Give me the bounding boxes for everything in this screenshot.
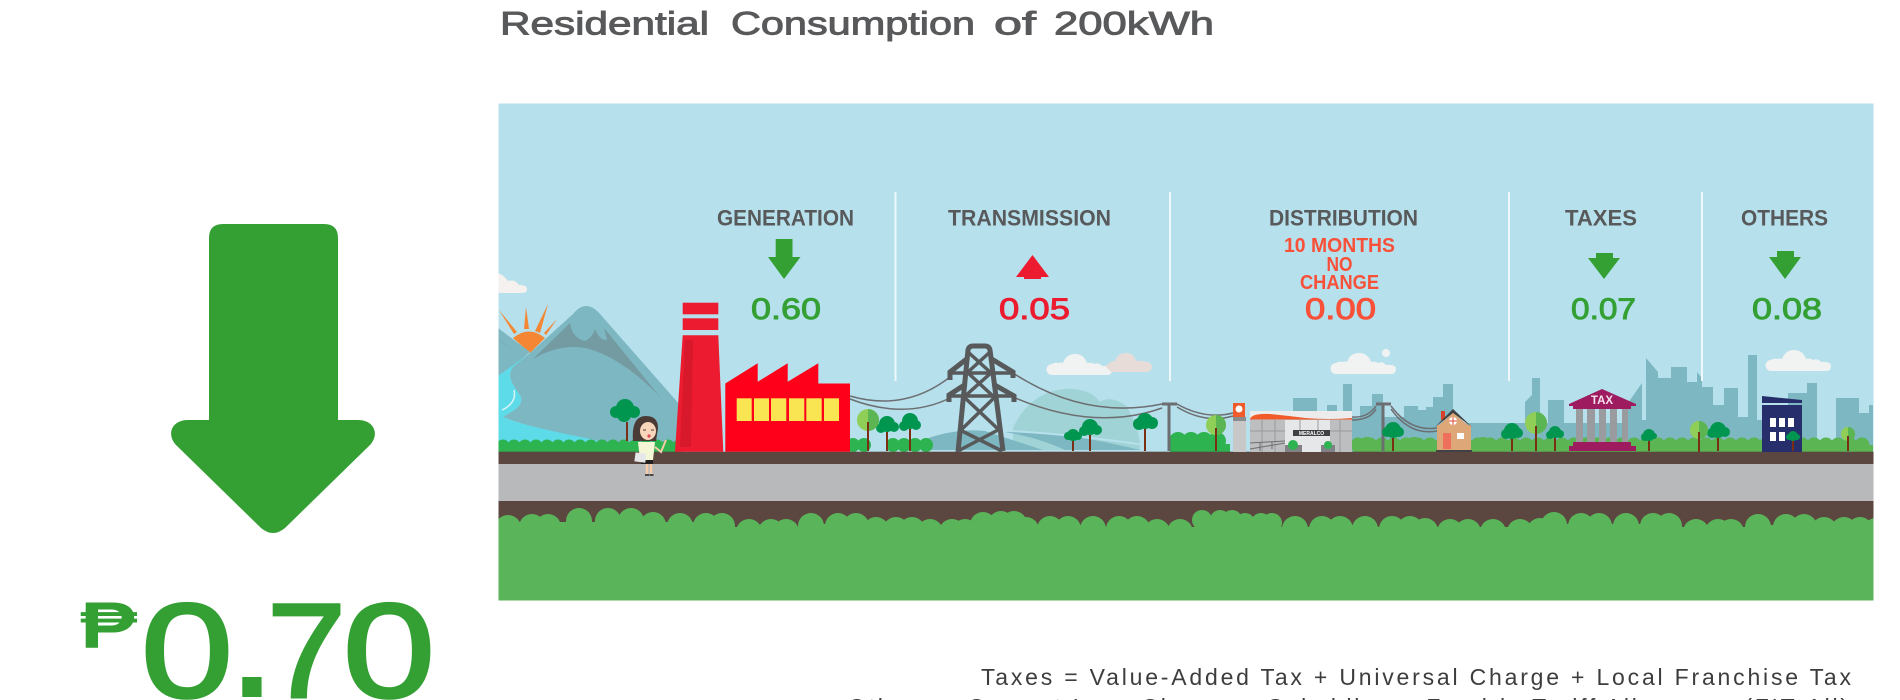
label: transmission: TRANSMISSION <box>948 206 1111 230</box>
total decrease amount <box>80 577 435 700</box>
icon: up arrow transmission <box>1016 255 1049 279</box>
shop building: MERALCO <box>1299 431 1324 437</box>
mountains <box>498 306 680 452</box>
total decrease amount: ₱ <box>80 588 138 662</box>
label: taxes: 0.07 <box>1571 293 1636 326</box>
panel: illustrated street scene <box>495 104 1889 600</box>
footnote: taxes and others definitions: Taxes = Value-Added Tax + Universal Charge + Local Franchise Tax <box>981 664 1852 690</box>
shop building <box>1233 403 1352 452</box>
sky <box>498 104 1874 452</box>
trees <box>610 399 1855 452</box>
green field with bush edge <box>495 508 1889 600</box>
city skyline <box>1293 355 1873 452</box>
transmission tower <box>949 346 1014 452</box>
pale hills <box>923 389 1145 450</box>
label: distribution: DISTRIBUTION <box>1269 206 1418 230</box>
title: 200kWh <box>1054 6 1214 42</box>
note: 10 months no change: CHANGE <box>1300 272 1379 294</box>
light green hedge <box>1352 437 1873 452</box>
label: distribution <box>1269 206 1418 326</box>
sun <box>499 304 557 353</box>
note: 10 months no change: NO <box>1326 254 1352 276</box>
title <box>500 6 1214 42</box>
footnote: taxes and others definitions <box>848 664 1852 700</box>
label: generation: GENERATION <box>717 206 854 230</box>
label: transmission: 0.05 <box>999 293 1070 326</box>
label: taxes <box>1565 206 1637 326</box>
icon: down arrow generation <box>768 239 800 279</box>
utility poles <box>1162 404 1391 451</box>
title: Residential <box>500 6 709 42</box>
clouds <box>498 273 1831 375</box>
icon: down arrow taxes <box>1588 253 1620 279</box>
label: others: 0.08 <box>1752 293 1822 326</box>
label: distribution: 0.00 <box>1305 293 1376 326</box>
label: others <box>1741 206 1828 326</box>
blue building <box>1762 396 1802 452</box>
dark green hedge <box>498 441 1230 452</box>
title: Consumption <box>731 6 975 42</box>
tax building: TAX <box>1591 395 1613 407</box>
note: 10 months no change: 10 MONTHS <box>1284 235 1395 257</box>
section dividers <box>896 192 1702 381</box>
note: 10 months no change <box>1285 238 1394 289</box>
house <box>1435 409 1472 452</box>
chimney <box>675 303 723 452</box>
factory <box>725 363 850 452</box>
ground: soil, road, lower soil <box>498 452 1874 528</box>
tax building <box>1569 389 1636 451</box>
icon: down arrow others <box>1769 251 1801 279</box>
character: woman with clipboard <box>633 416 666 475</box>
label: generation: 0.60 <box>751 293 821 326</box>
label: taxes: TAXES <box>1565 206 1637 230</box>
power lines <box>850 373 1437 432</box>
label: transmission <box>948 206 1111 326</box>
icon: big down arrow <box>171 224 375 533</box>
label: generation <box>717 206 854 326</box>
label: others: OTHERS <box>1741 206 1828 230</box>
title: of <box>994 6 1036 42</box>
